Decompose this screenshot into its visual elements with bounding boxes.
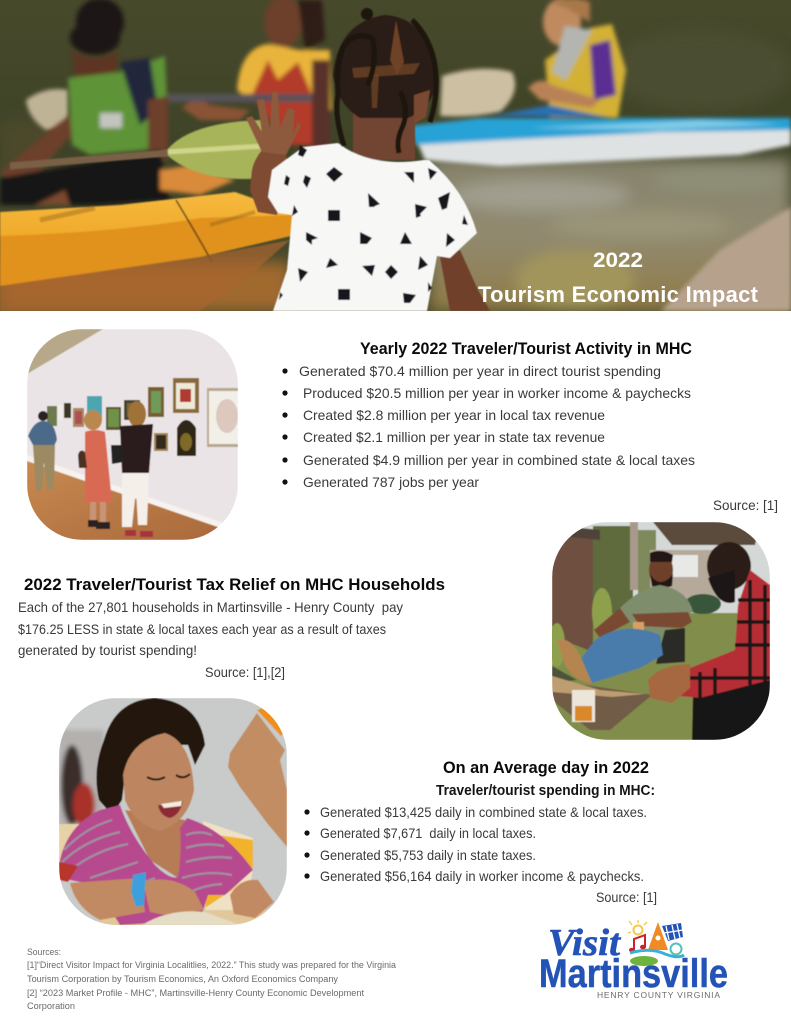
section heading: yearly activity: Yearly 2022 Traveler/Tourist Activity in MHC	[360, 339, 692, 358]
shoes	[557, 639, 592, 683]
sources list: [2] “2023 Market Profile - MHC”, Martinsville-Henry County Economic Development	[27, 988, 364, 999]
bullet list: average day	[304, 804, 647, 884]
raised arm and hand	[246, 92, 301, 215]
green paddle	[10, 120, 265, 179]
tax relief paragraph: $176.25 LESS in state & local taxes each year as a result of taxes	[18, 621, 386, 637]
bullet list: yearly activity: Created $2.1 million per year in state tax revenue	[303, 429, 605, 445]
man in plaid shirt	[707, 542, 751, 590]
grass	[552, 613, 770, 740]
face	[123, 733, 194, 831]
dress pattern	[279, 145, 468, 303]
bullet list: average day: Generated $13,425 daily in combined state & local taxes.	[320, 804, 647, 820]
arms and hands	[70, 878, 145, 920]
sources list: [1]“Direct Visitor Impact for Virginia Localitlies, 2022.” This study was prepared for the Virginia	[27, 960, 397, 971]
logo icon: sun, music note, kayaker, flag, waves	[628, 920, 684, 966]
table and cup	[552, 680, 652, 730]
trees and pergola	[593, 526, 633, 616]
floor	[27, 460, 218, 540]
sub-heading: average day spending: Traveler/tourist spending in MHC:	[436, 783, 655, 799]
chair	[656, 628, 685, 664]
bullet list: average day: Generated $7,671 daily in local taxes.	[320, 825, 536, 841]
source note: yearly activity: Source: [1]	[713, 497, 778, 513]
bullet list: yearly activity: Generated $70.4 million per year in direct tourist spending	[299, 363, 661, 379]
striped shirt	[60, 805, 253, 925]
bullet list: average day: Generated $5,753 daily in state taxes.	[320, 847, 536, 863]
hero photo: child waving at kayakers	[0, 0, 791, 311]
photo: two men on a patio	[549, 522, 770, 740]
bullet list: yearly activity: Produced $20.5 million per year in worker income & paychecks	[303, 385, 691, 401]
man in green shirt	[648, 561, 674, 583]
source note: tax relief: Source: [1],[2]	[205, 664, 285, 680]
sources list: Corporation	[27, 1001, 75, 1012]
white dress	[268, 143, 477, 311]
blurred background people	[59, 730, 104, 830]
framed paintings	[173, 378, 199, 413]
bullet list: yearly activity	[282, 363, 695, 490]
woman in black top	[128, 401, 146, 427]
hair	[96, 698, 205, 815]
jeans	[580, 629, 663, 683]
woman on the left in green vest	[0, 0, 235, 205]
hero title	[478, 249, 759, 307]
blue wristband	[131, 872, 146, 907]
woman on the right in life vest	[490, 0, 626, 118]
tax relief paragraph	[18, 599, 403, 658]
ceiling	[27, 329, 103, 374]
head and braids	[333, 8, 438, 153]
source note: average day: Source: [1]	[596, 889, 657, 905]
title year: 2022	[593, 249, 643, 272]
tax relief paragraph: Each of the 27,801 households in Martinsville - Henry County pay	[18, 599, 403, 615]
logo wordmark: Martinsville	[539, 952, 728, 996]
brown shed wall	[552, 533, 593, 652]
neck	[125, 810, 185, 878]
red cup	[59, 862, 78, 882]
bullet list: yearly activity: Generated $4.9 million per year in combined state & local taxes	[303, 452, 695, 468]
logo wordmark: HENRY COUNTY VIRGINIA	[597, 990, 720, 1000]
logo wordmark: Visit	[548, 922, 621, 964]
section heading: tax relief: 2022 Traveler/Tourist Tax Relief on MHC Households	[24, 575, 445, 594]
section heading: average day: On an Average day in 2022	[443, 758, 649, 777]
photo: laughing girl at a craft table	[59, 698, 287, 930]
fabric on table	[142, 911, 240, 925]
logo wordmark	[539, 922, 728, 1000]
child	[246, 8, 490, 311]
sources list: Sources:	[27, 947, 61, 958]
plaid man pants	[692, 680, 770, 740]
photo: art gallery visitors	[27, 329, 238, 540]
adult arm	[228, 713, 287, 847]
bullet list: average day: Generated $56,164 daily in worker income & paychecks.	[320, 868, 644, 884]
sources list	[27, 947, 397, 1012]
right arm	[440, 250, 490, 311]
logo: Visit Martinsville	[539, 920, 728, 1000]
woman in the middle with red vest	[166, 0, 332, 150]
bullet list: yearly activity: Created $2.8 million per year in local tax revenue	[303, 407, 605, 423]
blue kayak	[410, 118, 791, 166]
neck	[353, 112, 415, 160]
sources list: Tourism Corporation by Tourism Economics, An Oxford Economics Company	[27, 974, 338, 985]
man in blue shirt	[38, 411, 48, 421]
orange kayak	[0, 192, 295, 311]
beige paddle blades	[26, 69, 515, 130]
woman in coral dress	[84, 410, 102, 430]
table and chair	[59, 823, 80, 862]
hero title: Tourism Economic Impact	[478, 282, 759, 307]
rock	[661, 207, 791, 311]
bullet list: yearly activity: Generated 787 jobs per year	[303, 474, 479, 490]
tax relief paragraph: generated by tourist spending!	[18, 642, 197, 658]
